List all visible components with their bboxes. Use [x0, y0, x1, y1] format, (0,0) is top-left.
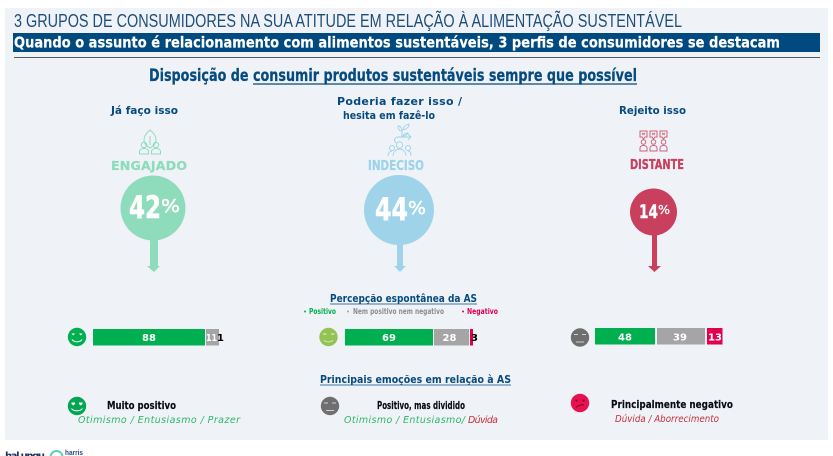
- footer logos: [5, 448, 83, 456]
- emotion: principalmente negativo: Principalmente negativo: [611, 399, 733, 411]
- icon: happy face: [68, 328, 86, 346]
- icon: people with rejection bubbles: [640, 131, 667, 151]
- heading: principais emoções: Principais emoções em relação à AS: [320, 373, 511, 386]
- circle 42%: [120, 176, 186, 240]
- column: distante: [619, 104, 686, 272]
- label: poderia fazer isso: hesita em fazê-lo: [343, 109, 435, 122]
- legend: [304, 307, 498, 316]
- label: poderia fazer isso: [337, 95, 463, 122]
- arrow: [648, 232, 661, 272]
- icon: happy face: [68, 397, 86, 415]
- legend: Nem positivo nem negativo: [353, 307, 444, 316]
- bar chart: distante: [571, 328, 722, 347]
- bar chart: engajado: 11: [206, 333, 217, 344]
- name: engajado: ENGAJADO: [111, 158, 187, 173]
- circle 14%: %: [658, 203, 670, 217]
- label: já faço isso: Já faço isso: [110, 104, 178, 117]
- emotion: muito positivo: Otimismo / Entusiasmo / Prazer: [78, 415, 241, 426]
- section heading: disposição: Disposição de consumir produtos sustentáveis sempre que possível: [149, 66, 637, 85]
- bar chart: indeciso: 28: [443, 333, 456, 344]
- bar chart: indeciso: 69: [382, 333, 396, 344]
- emotion: principalmente negativo: Dúvida / Aborrecimento: [615, 414, 719, 425]
- label: poderia fazer isso: Poderia fazer isso /: [337, 95, 463, 108]
- legend: Negativo: [467, 307, 498, 316]
- heading: percepção espontânea: Percepção espontânea da AS: [330, 292, 477, 305]
- circle 44%: [364, 175, 434, 245]
- circle 44%: %: [408, 198, 426, 219]
- circle 42%: %: [161, 196, 180, 217]
- icon: sad face: [571, 394, 589, 412]
- bar chart: distante: 39: [673, 332, 687, 344]
- label: rejeito isso: Rejeito isso: [619, 104, 686, 117]
- name: distante: DISTANTE: [630, 158, 684, 173]
- emotion: positivo, mas dividido: Dúvida: [468, 415, 498, 426]
- emotion: muito positivo: [68, 397, 241, 426]
- emotion: muito positivo: Muito positivo: [107, 400, 176, 412]
- emotion: positivo, mas dividido: [321, 397, 498, 426]
- bar chart: engajado: 1: [217, 333, 224, 344]
- column: engajado: [110, 104, 187, 272]
- circle 44%: 44: [375, 192, 408, 228]
- icon: people with plant: [388, 124, 411, 156]
- bar chart: indeciso: 3: [471, 333, 478, 344]
- circle 14%: [630, 188, 677, 236]
- circle 14%: 14: [639, 201, 658, 223]
- emotion: positivo, mas dividido: Otimismo / Entusiasmo/: [344, 415, 467, 426]
- circle 42%: 42: [129, 190, 161, 226]
- icon: people with leaf: [140, 130, 160, 154]
- name: indeciso: INDECISO: [368, 159, 424, 174]
- column: indeciso: [337, 95, 463, 272]
- arrow: [394, 242, 406, 272]
- title: 3 GRUPOS DE CONSUMIDORES NA SUA ATITUDE EM RELAÇÃO À ALIMENTAÇÃO SUSTENTÁVEL: [14, 10, 682, 31]
- bar chart: engajado: 88: [142, 333, 156, 344]
- bar chart: engajado: [68, 328, 224, 346]
- bar chart: distante: 13: [708, 332, 722, 344]
- bar chart: distante: 48: [618, 332, 632, 344]
- icon: neutral face: [321, 397, 339, 415]
- bar chart: indeciso: [319, 328, 478, 346]
- arrow: [147, 238, 160, 272]
- icon: neutral-happy face: [319, 328, 338, 346]
- icon: neutral face: [571, 328, 589, 347]
- emotion: positivo, mas dividido: Positivo, mas dividido: [377, 400, 465, 412]
- emotion: principalmente negativo: [571, 394, 733, 425]
- legend: Positivo: [309, 307, 336, 316]
